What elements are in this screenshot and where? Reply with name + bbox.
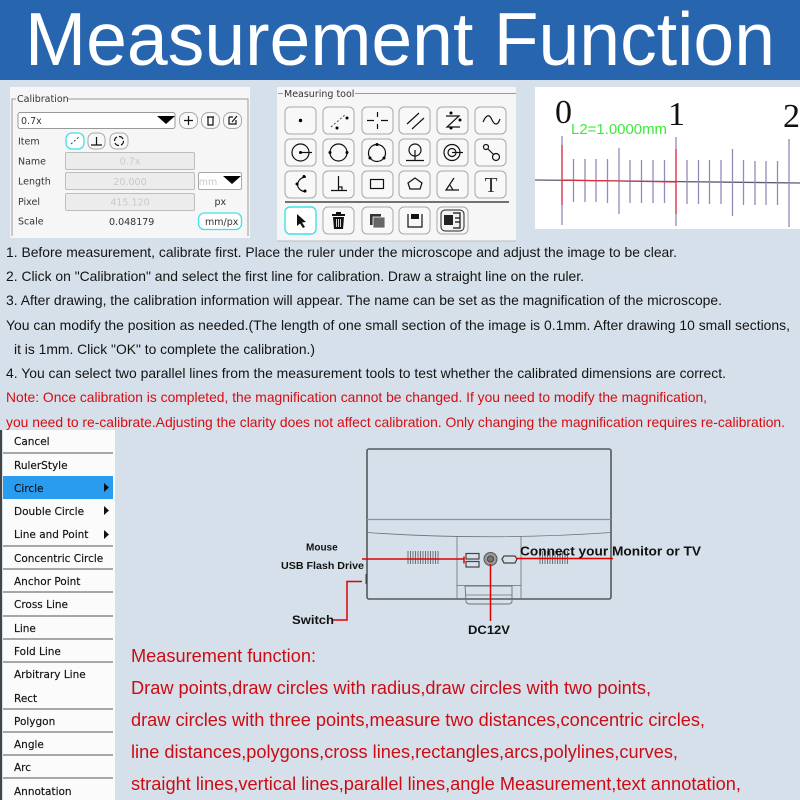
ruler numbers: 0 — [555, 94, 572, 131]
menu labels: Double Circle — [14, 506, 84, 518]
panel: calibration — [10, 87, 250, 238]
highlighted item — [3, 476, 113, 499]
diagram: monitor rear view — [366, 449, 611, 604]
menu labels: Line — [14, 623, 36, 635]
panel: calibration: px — [214, 197, 227, 208]
ruler numbers: 1 — [668, 96, 685, 133]
panel: calibration: Calibration — [17, 94, 69, 105]
unit dropdown: mm — [199, 177, 217, 188]
panel: calibration: Length — [18, 176, 51, 188]
add, delete, edit buttons — [180, 112, 242, 128]
pixel field — [66, 194, 194, 210]
connector lines — [333, 556, 613, 621]
panel: tool menu — [0, 430, 115, 800]
name field — [66, 152, 194, 170]
note text — [6, 389, 785, 430]
tool buttons row 2 — [285, 139, 506, 166]
panel: calibration: Item — [18, 136, 40, 148]
measurement function text: Draw points,draw circles with radius,draw circles with two points, — [131, 678, 651, 698]
menu labels: Annotation — [14, 786, 72, 798]
calibration marker — [562, 145, 676, 214]
label: monitor: Connect your Monitor or TV — [520, 544, 701, 558]
magnification dropdown: 0.7x — [21, 116, 42, 127]
measurement function text: line distances,polygons,cross lines,rectangles,arcs,polylines,curves, — [131, 742, 678, 762]
menu labels: Fold Line — [14, 646, 61, 658]
panel: calibration: Pixel — [18, 197, 40, 208]
panel: ruler calibration photo — [535, 87, 800, 229]
instructions text: it is 1mm. Click "OK" to complete the calibration.) — [14, 341, 315, 357]
calibration type icons — [66, 133, 128, 149]
menu labels: Rect — [14, 693, 37, 705]
menu labels: Line and Point — [14, 529, 88, 541]
menu labels: RulerStyle — [14, 460, 68, 472]
menu labels: Circle — [14, 483, 44, 495]
pixel field: 415.120 — [110, 198, 150, 208]
panel: calibration: Scale — [18, 216, 44, 228]
tool buttons row 3: T — [485, 173, 498, 197]
ventilation grilles — [408, 551, 438, 564]
instructions text: 4. You can select two parallel lines from the measurement tools to test whether the calibrated dimensions are correct. — [6, 365, 726, 381]
measurement function text: straight lines,vertical lines,parallel lines,angle Measurement,text annotation, — [131, 774, 741, 794]
panel: calibration: 0.048179 — [109, 217, 154, 228]
calibration length label: L2=1.0000mm — [571, 122, 667, 138]
instructions text: You can modify the position as needed.(The length of one small section of the image is 0.1mm. After drawing 10 small sections, — [6, 317, 790, 333]
menu labels — [14, 436, 103, 798]
instructions text — [6, 244, 790, 381]
label: usb flash drive: USB Flash Drive — [281, 561, 364, 572]
menu labels: Concentric Circle — [14, 553, 103, 565]
measurement function text: draw circles with three points,measure two distances,concentric circles, — [131, 710, 705, 730]
panel: measuring tool: Measuring tool — [284, 89, 354, 100]
measurement function text: Measurement function: — [131, 646, 316, 666]
tool buttons row 3 — [285, 171, 506, 198]
scale unit button: mm/px — [205, 217, 239, 228]
panel: calibration: Name — [18, 156, 46, 168]
ports — [366, 552, 517, 584]
panel: measuring tool — [277, 87, 516, 241]
unit dropdown — [198, 172, 242, 190]
note text: Note: Once calibration is completed, the magnification cannot be changed. If you need to modify the magnification, — [6, 389, 707, 405]
tool buttons row 1 — [285, 107, 506, 134]
name field: 0.7x — [120, 156, 141, 168]
menu labels: Polygon — [14, 716, 55, 728]
ruler numbers — [555, 94, 800, 135]
label: switch: Switch — [292, 613, 334, 627]
label: mouse: Mouse — [306, 542, 338, 554]
tool buttons row 4 — [285, 207, 468, 234]
title banner — [0, 0, 800, 81]
measurement function text — [131, 646, 741, 794]
instructions text: 2. Click on "Calibration" and select the first line for calibration. Draw a straight line on the ruler. — [6, 268, 584, 284]
scale unit button — [198, 213, 242, 230]
instructions text: 3. After drawing, the calibration information will appear. The name can be set as the magnification of the microscope. — [6, 292, 722, 308]
note text: you need to re-calibrate.Adjusting the clarity does not affect calibration. Only changing the magnification requires re-calibration. — [6, 414, 785, 430]
label: dc12v: DC12V — [468, 623, 510, 637]
length field — [66, 172, 194, 190]
ruler scale — [535, 136, 800, 227]
magnification dropdown — [18, 112, 175, 128]
length field: 20.000 — [113, 177, 147, 188]
menu labels: Arbitrary Line — [14, 669, 86, 681]
menu labels: Arc — [14, 762, 31, 774]
menu labels: Angle — [14, 739, 44, 751]
ruler numbers: 2 — [783, 98, 800, 135]
menu labels: Cross Line — [14, 599, 68, 611]
menu labels: Cancel — [14, 436, 50, 448]
submenu arrows — [104, 483, 109, 539]
instructions text: 1. Before measurement, calibrate first. Place the ruler under the microscope and adjust the image to be clear. — [6, 244, 677, 260]
menu labels: Anchor Point — [14, 576, 80, 588]
